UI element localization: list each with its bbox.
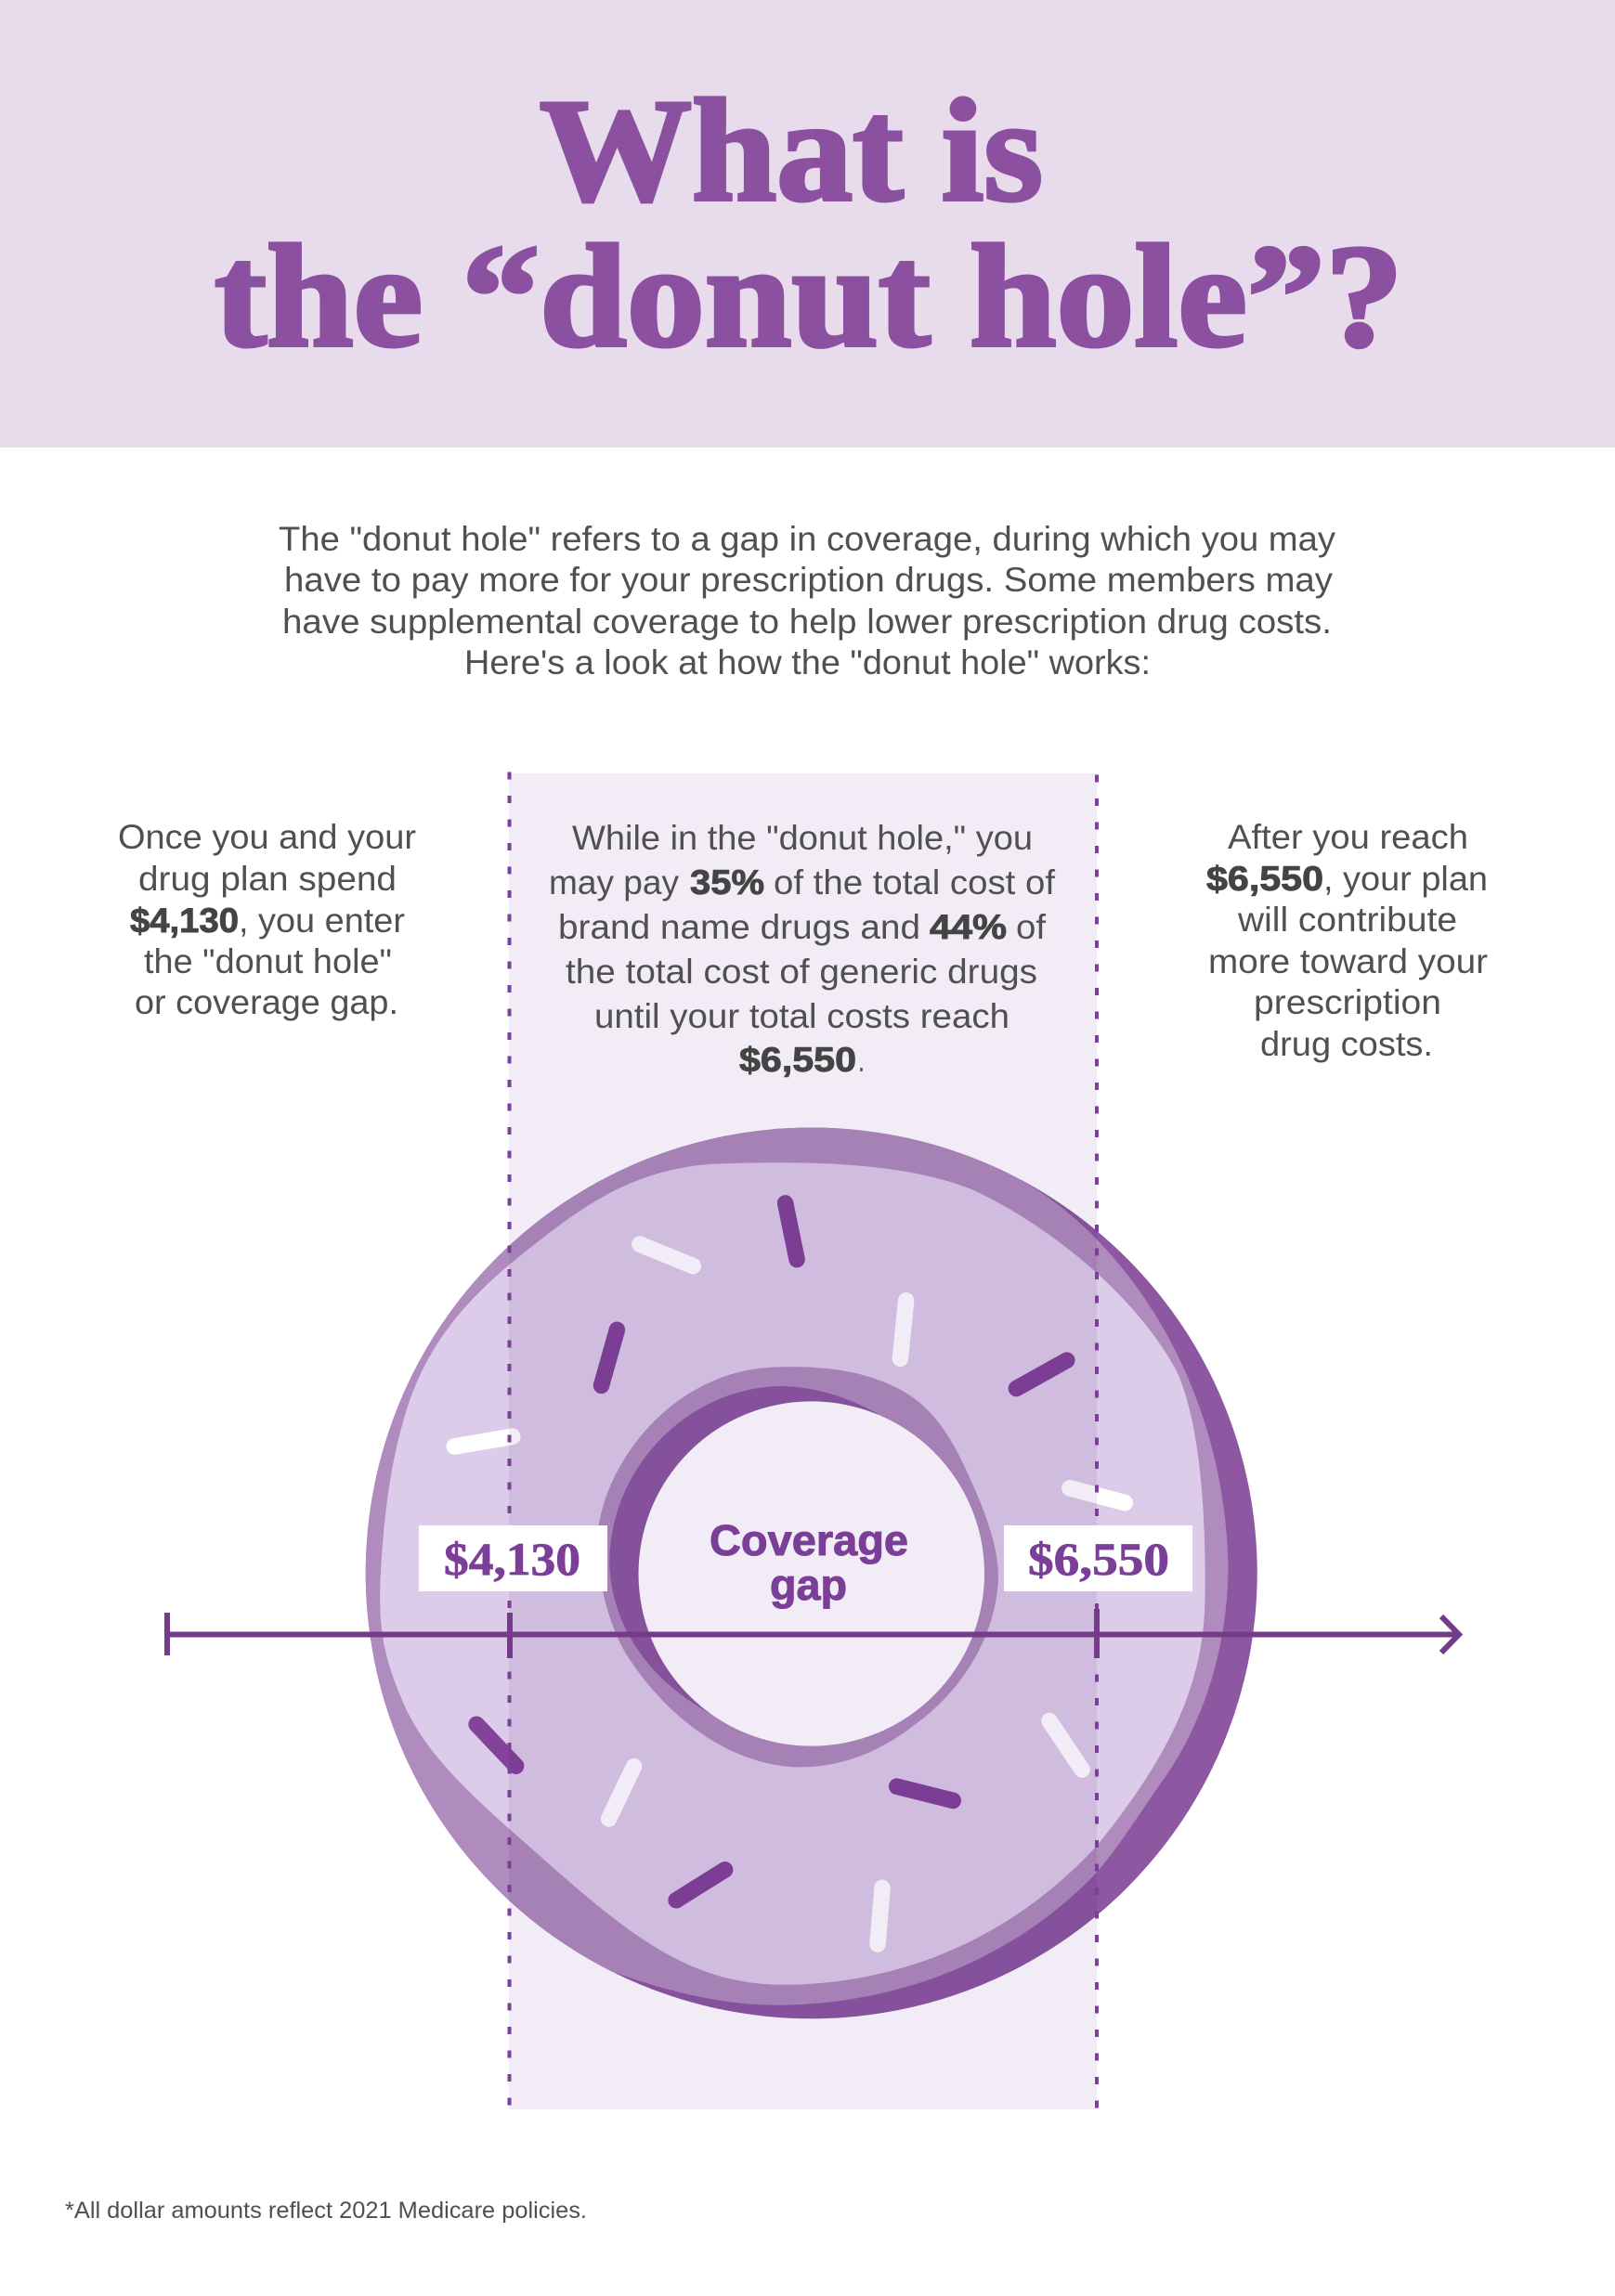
coverage gap label: gap <box>770 1561 847 1609</box>
center column text: until your total costs reach <box>594 997 1009 1035</box>
axis arrow <box>167 1609 1459 1658</box>
right column text: , your plan <box>1323 860 1488 898</box>
right column text: more toward your <box>1208 942 1488 980</box>
footnote: *All dollar amounts reflect 2021 Medicare policies. <box>65 2198 587 2224</box>
right column text <box>1206 818 1488 1063</box>
left column text <box>118 818 416 1021</box>
right column text: prescription <box>1254 983 1441 1021</box>
left column text: the "donut hole" <box>144 942 392 980</box>
left column text: , you enter <box>239 902 405 940</box>
right column text: drug costs. <box>1260 1025 1433 1063</box>
left column text: $4,130 <box>130 902 239 940</box>
center column text: may pay <box>549 863 679 902</box>
center column text: of the total cost of <box>774 863 1056 902</box>
coverage gap label: Coverage <box>710 1516 908 1564</box>
right column text: $6,550 <box>1206 860 1323 898</box>
label: $4,130 <box>419 1525 607 1591</box>
sprinkles <box>454 1203 1125 1944</box>
intro text block: The "donut hole" refers to a gap in coverage, during which you may <box>279 520 1336 558</box>
coverage gap label <box>710 1516 908 1609</box>
dotted boundary lines <box>509 772 1097 2109</box>
center column text: . <box>858 1041 865 1079</box>
center column text: of <box>1016 908 1047 946</box>
center column text: While in the "donut hole," you <box>572 819 1033 857</box>
left column text: drug plan spend <box>138 860 397 898</box>
label: $6,550: $6,550 <box>1028 1533 1169 1585</box>
left column text: Once you and your <box>118 818 416 856</box>
intro text block: have supplemental coverage to help lower prescription drug costs. <box>282 603 1332 641</box>
coverage gap band <box>509 773 1097 2109</box>
center column text <box>549 819 1056 1079</box>
donut illustration <box>353 1114 1257 2018</box>
center column text: $6,550 <box>739 1041 856 1079</box>
right column text: After you reach <box>1228 818 1468 856</box>
label: $4,130: $4,130 <box>444 1533 580 1585</box>
intro text block: Here's a look at how the "donut hole" works: <box>464 643 1151 681</box>
label: $6,550 <box>1004 1525 1192 1591</box>
center column text: 44% <box>930 908 1007 946</box>
intro text block <box>279 520 1336 681</box>
right column text: will contribute <box>1237 901 1457 939</box>
title: the “donut hole”? <box>215 215 1403 378</box>
title: What is <box>540 70 1043 232</box>
header panel <box>0 0 1615 448</box>
left column text: or coverage gap. <box>135 983 398 1021</box>
center column text: brand name drugs and <box>558 908 920 946</box>
intro text block: have to pay more for your prescription drugs. Some members may <box>284 561 1334 599</box>
center column text: 35% <box>690 863 764 902</box>
center column text: the total cost of generic drugs <box>566 953 1037 991</box>
title <box>215 70 1403 378</box>
